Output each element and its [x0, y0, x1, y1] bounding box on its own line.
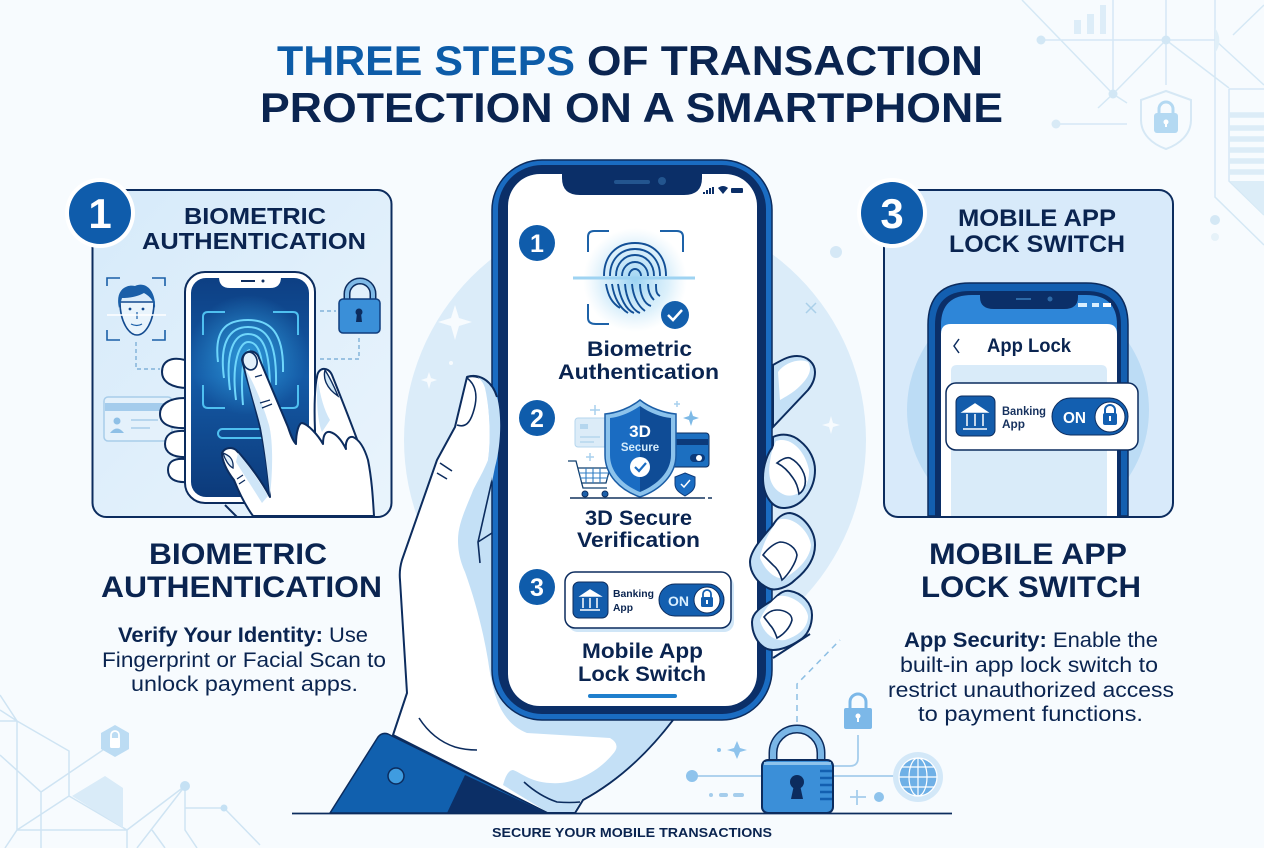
label: 3D secure verification: Verification: [577, 529, 700, 552]
title: PROTECTION ON A SMARTPHONE: [260, 84, 1003, 131]
central smartphone: [492, 160, 772, 720]
right caption description: [888, 629, 1174, 726]
panel: step 1 biometric authentication: [92, 190, 392, 517]
sparkle decorations: [421, 246, 842, 434]
step 2 number: 2: [530, 405, 544, 433]
banking app toggle card: App: [1002, 419, 1025, 431]
icon: 3D secure shield with cart and cards: [568, 400, 712, 498]
label: mobile app lock switch: Lock Switch: [578, 663, 706, 686]
home indicator: [588, 694, 677, 698]
panel background: [92, 190, 392, 517]
icon: padlock: [339, 281, 380, 333]
thumb nail and creases: [223, 375, 272, 484]
panel heading: MOBILE APP: [958, 205, 1116, 232]
thumb over phone edge: [457, 376, 500, 482]
finger four: [752, 591, 812, 658]
step badge 3: [857, 178, 927, 248]
panel heading: LOCK SWITCH: [949, 231, 1125, 258]
left caption description: Fingerprint or Facial Scan to: [102, 649, 386, 672]
right caption heading: LOCK SWITCH: [921, 571, 1141, 604]
banking app toggle card: App: [613, 602, 633, 614]
title: [260, 37, 1003, 131]
step badge 3: 3: [880, 190, 904, 237]
panel heading: BIOMETRIC: [184, 203, 326, 229]
circle behind phone: [907, 343, 1149, 477]
label: 3D secure verification: [577, 507, 700, 552]
footer tagline: SECURE YOUR MOBILE TRANSACTIONS: [492, 825, 772, 840]
icon: small padlock: [844, 694, 872, 729]
label: 3D secure verification: 3D Secure: [585, 507, 692, 530]
right caption description: App Security: Enable the: [904, 629, 1158, 652]
phone in hand: [185, 272, 315, 503]
step 1 number: [519, 225, 555, 261]
icon: shield lock, top right: [1141, 91, 1191, 149]
dashed connector to lock: [797, 640, 840, 722]
finger one: [773, 356, 815, 427]
left caption heading: [101, 538, 382, 604]
panel heading: AUTHENTICATION: [142, 228, 366, 254]
icon: id card: [104, 397, 172, 441]
panel: step 3 mobile app lock switch: [884, 190, 1173, 531]
title: THREE STEPS: [277, 37, 575, 84]
right hand fingers: [750, 356, 815, 658]
finger three: [750, 513, 815, 589]
left caption heading: BIOMETRIC: [149, 538, 327, 571]
banking app toggle card: ON: [668, 593, 689, 609]
banking app toggle card: Banking: [1002, 406, 1046, 418]
banking app toggle card: [565, 572, 734, 632]
back fingers: [160, 359, 188, 482]
sleeve cuff: [330, 733, 548, 813]
baseline rule: [292, 812, 952, 814]
background circle behind central phone: [404, 209, 866, 671]
hand with pointing finger: [222, 350, 374, 517]
icon: hexagon lock, bottom left: [101, 725, 129, 757]
phone app lock screen: [928, 283, 1128, 516]
label: biometric authentication: Biometric: [587, 338, 692, 361]
palm shading: [458, 385, 671, 812]
right caption heading: [921, 538, 1141, 604]
step 2 number: [519, 400, 555, 436]
right finger behind hand: [315, 369, 358, 452]
panel background: [884, 190, 1173, 517]
right caption description: built-in app lock switch to: [900, 654, 1158, 677]
finger shading: [236, 368, 272, 503]
step 1 number: 1: [530, 230, 544, 258]
icon: large padlock: [762, 729, 833, 813]
right caption description: restrict unauthorized access: [888, 679, 1174, 702]
left caption heading: AUTHENTICATION: [101, 571, 382, 604]
icon: 3D secure shield with cart and cards: 3D: [629, 422, 651, 441]
step badge 1: [65, 178, 135, 248]
step badge 1: 1: [88, 190, 112, 237]
icon: face scan: [107, 278, 166, 340]
circuit lines around padlock: [686, 735, 898, 805]
panel heading: [142, 203, 366, 254]
left caption description: [102, 624, 386, 696]
status bar icons: [703, 186, 743, 194]
icon: 3D secure shield with cart and cards: Secure: [621, 442, 659, 454]
dashed connectors: [136, 311, 359, 369]
fingernail: [241, 350, 259, 372]
label: biometric authentication: [558, 338, 719, 384]
panel heading: [949, 205, 1125, 258]
decorative network: top right: [1022, 0, 1264, 245]
label: mobile app lock switch: Mobile App: [582, 640, 703, 663]
palm creases: [419, 463, 580, 802]
banking app toggle card: [946, 383, 1138, 450]
decorative network: bottom left: [0, 695, 260, 848]
title: OF TRANSACTION: [587, 37, 983, 84]
right caption heading: MOBILE APP: [929, 538, 1127, 571]
icon: glowing fingerprint: [188, 295, 308, 415]
label: mobile app lock switch: [578, 640, 706, 686]
phone app lock screen: App Lock: [987, 336, 1071, 357]
phone notch: [562, 173, 702, 195]
left caption description: Verify Your Identity: Use: [118, 624, 368, 647]
step 3 number: [519, 569, 555, 605]
icon: fingerprint scan: [573, 228, 695, 332]
finger two: [763, 435, 815, 508]
banking app toggle card: Banking: [613, 588, 654, 600]
label: biometric authentication: Authentication: [558, 361, 719, 384]
right caption description: to payment functions.: [918, 703, 1143, 726]
icon: globe: [893, 752, 943, 802]
banking app toggle card: ON: [1063, 410, 1086, 427]
hand palm behind phone: [393, 376, 673, 813]
left caption description: unlock payment apps.: [131, 673, 358, 696]
step 3 number: 3: [530, 574, 544, 602]
